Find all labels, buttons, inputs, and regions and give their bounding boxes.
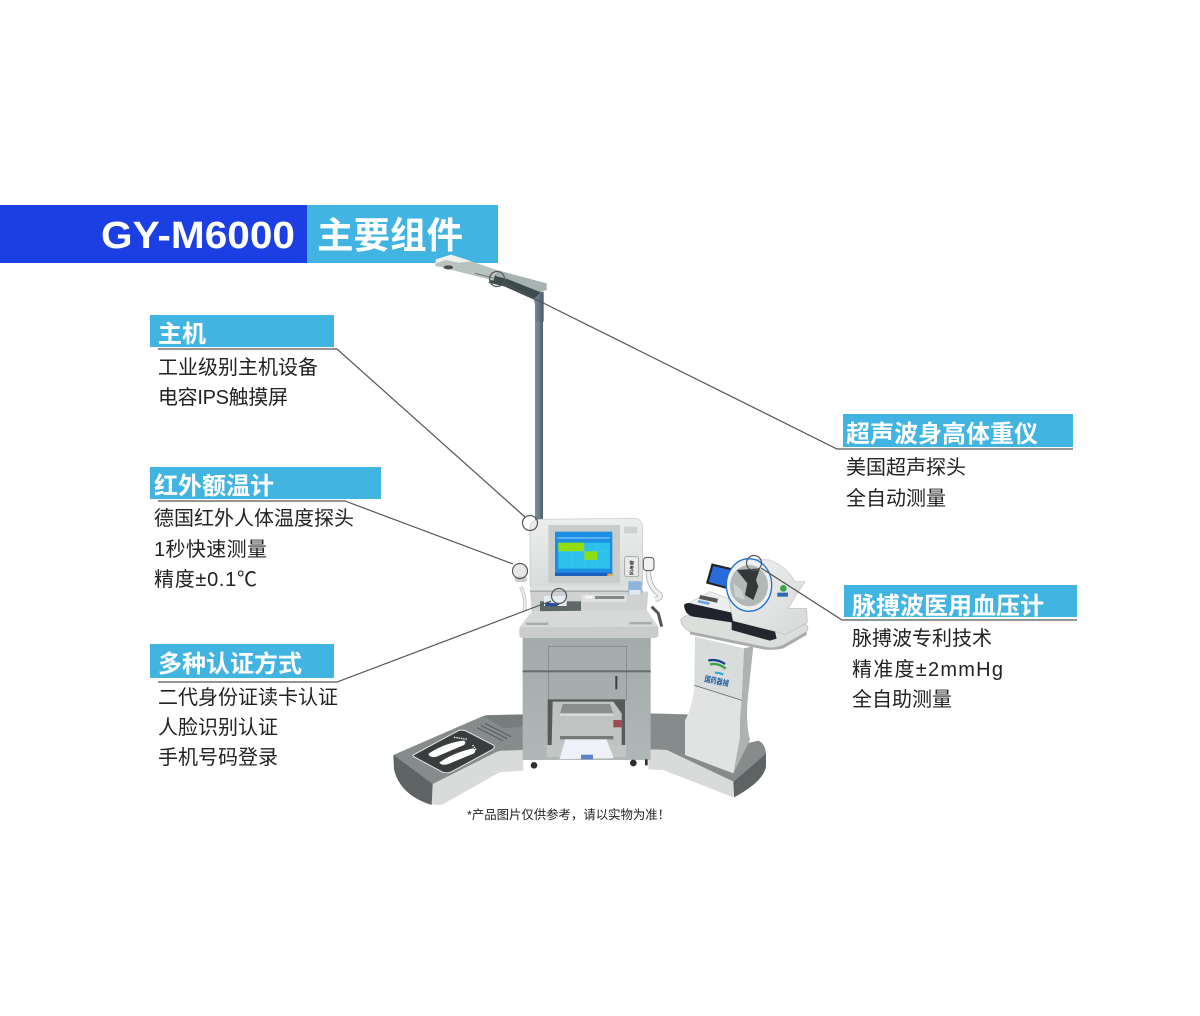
- callout: ultrasonic height and weight: 全自动测量: [846, 487, 946, 510]
- blood pressure stand column: 国药器械: [704, 674, 730, 688]
- monitor and console: 御: [629, 560, 634, 567]
- title banner: [0, 205, 498, 263]
- column pole: [535, 295, 543, 521]
- ultrasonic sensor head: [435, 255, 547, 322]
- callout: authentication: 多种认证方式: [158, 650, 302, 678]
- monitor and console: [514, 518, 662, 638]
- callout: infrared thermometer: 精度±0.1℃: [154, 568, 257, 591]
- callout: infrared thermometer: 德国红外人体温度探头: [154, 507, 354, 530]
- callout: infrared thermometer: 1秒快速测量: [154, 538, 267, 561]
- callout: authentication: 人脸识别认证: [158, 716, 278, 739]
- title banner: GY-M6000: [101, 215, 295, 257]
- callout: pulse wave blood pressure: 脉搏波专利技术: [852, 627, 992, 650]
- leader lines and target circles: [158, 272, 1077, 682]
- callout: authentication: 手机号码登录: [158, 746, 278, 769]
- callout: pulse wave blood pressure: 精准度±2mmHg: [852, 658, 1003, 681]
- printer: [552, 702, 622, 745]
- callout: authentication: 二代身份证读卡认证: [158, 686, 338, 709]
- title banner: 主要组件: [317, 215, 463, 256]
- callout: pulse wave blood pressure: [844, 585, 1077, 711]
- callout: ultrasonic height and weight: [843, 414, 1073, 510]
- callout: main unit: 工业级别主机设备: [158, 356, 318, 379]
- right foot platform: [648, 713, 766, 797]
- callout: main unit: 主机: [158, 321, 206, 348]
- callout: infrared thermometer: 红外额温计: [154, 473, 274, 500]
- footnote: *产品图片仅供参考，请以实物为准！: [467, 807, 670, 822]
- product illustration: health check station: [393, 255, 808, 805]
- left foot platform: [393, 714, 523, 805]
- callout: pulse wave blood pressure: 全自助测量: [852, 688, 952, 711]
- callout: main unit: 电容IPS触摸屏: [158, 386, 288, 409]
- callout: pulse wave blood pressure: 脉搏波医用血压计: [852, 593, 1044, 620]
- main cabinet: [523, 637, 651, 769]
- callout: authentication: [150, 644, 338, 769]
- monitor and console: 考: [629, 566, 634, 572]
- callout: ultrasonic height and weight: 美国超声探头: [846, 456, 966, 479]
- blood pressure monitor on table: [681, 559, 808, 650]
- monitor and console: 区: [629, 571, 634, 576]
- callout: ultrasonic height and weight: 超声波身高体重仪: [846, 421, 1038, 448]
- blood pressure stand column: [685, 637, 753, 773]
- callout: infrared thermometer: [150, 467, 381, 591]
- callout: main unit: [150, 315, 334, 409]
